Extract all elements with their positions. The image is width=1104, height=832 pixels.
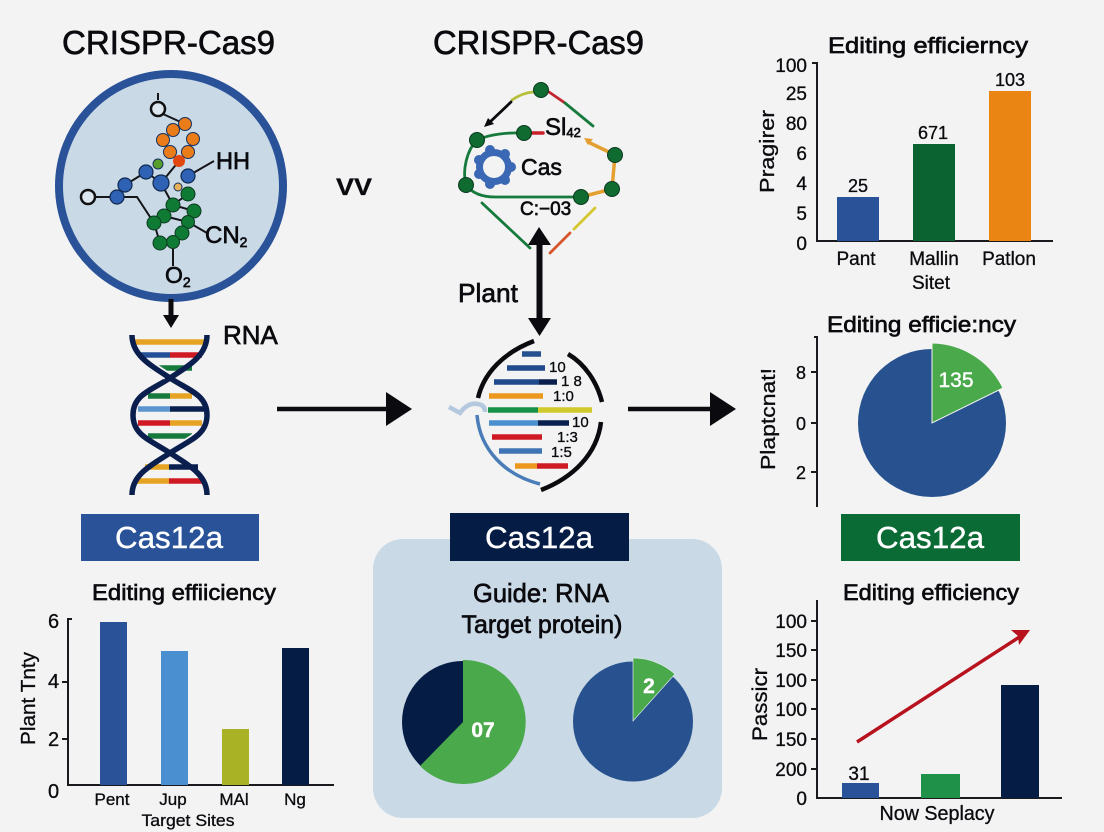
chart: bottom-left bar chart: Ng: [284, 790, 306, 809]
chart: bottom-right bar chart: Now Seplacy: [880, 803, 994, 825]
chart: bottom-left bar chart: 6: [48, 611, 59, 633]
chart: middle-right pie: 135: [938, 369, 974, 392]
chart: bottom-left bar chart: Target Sites: [142, 811, 234, 830]
pie: navy and green: 07: [471, 719, 495, 742]
panel: molecule circle: 2: [240, 234, 248, 250]
arrow: molecule to DNA: [163, 299, 179, 328]
diagram: sequence bars: 10: [572, 414, 589, 431]
chart: top-right bar chart: Patlon: [982, 249, 1036, 270]
panel: guide RNA: Target protein): [462, 611, 622, 639]
diagram: Cas network: C:−03: [520, 199, 571, 220]
banner: center Cas12a: [450, 513, 629, 561]
title: left: CRISPR-Cas9: [62, 24, 275, 61]
chart: bottom-left bar chart: MAl: [219, 790, 249, 809]
panel: molecule circle: [59, 74, 283, 298]
chart: bottom-right bar chart: Passicr: [749, 668, 772, 741]
chart: middle-right pie: 2: [796, 463, 806, 483]
panel: molecule circle: CN: [205, 222, 240, 249]
diagram: Cas network: [458, 82, 622, 253]
chart: bottom-right bar chart: 100: [775, 671, 807, 692]
chart: bottom-left bar chart: 0: [48, 781, 59, 803]
chart: bottom-left bar chart: Pent: [95, 790, 130, 809]
arrow: DNA to diagram: [277, 407, 392, 411]
diagram: sequence bars: [449, 341, 602, 490]
arrowhead: DNA to diagram: [386, 392, 412, 426]
arrow: diagram to pie: [628, 407, 714, 411]
chart: top-right bar chart: 80: [786, 114, 807, 135]
chart: bottom-right bar chart: Editing efficiency: [843, 580, 1019, 605]
chart: middle-right pie: Editing efficie:ncy: [827, 312, 1016, 337]
label: Plant: Plant: [458, 278, 519, 308]
diagram: Cas network: Cas: [521, 154, 562, 180]
pie: blue and green: [573, 658, 693, 782]
panel: molecule circle: O: [165, 262, 183, 288]
chart: top-right bar chart: 0: [796, 234, 807, 255]
chart: bottom-right bar chart: 150: [775, 641, 807, 662]
chart: top-right bar chart: 25: [848, 176, 868, 196]
double arrow: vertical: [528, 227, 551, 336]
chart: top-right bar chart: 25: [786, 84, 807, 105]
chart: top-right bar chart: 103: [995, 70, 1025, 90]
banner: right Cas12a: [841, 514, 1020, 561]
diagram: sequence bars: 10: [549, 359, 566, 376]
panel: guide RNA: [373, 539, 722, 818]
chart: top-right bar chart: [757, 33, 1053, 294]
chart: bottom-right bar chart: 0: [796, 789, 807, 810]
chart: bottom-left bar chart: Plant Tnty: [18, 652, 40, 745]
chart: top-right bar chart: Mallin: [909, 249, 959, 270]
pie: navy and green: [402, 660, 526, 784]
chart: bottom-right bar chart: 200: [775, 760, 807, 781]
banner: center Cas12a: Cas12a: [485, 520, 594, 555]
arrowhead: diagram to pie: [710, 392, 736, 426]
chart: bottom-right bar chart: 31: [848, 764, 870, 785]
chart: bottom-right bar chart: 150: [775, 730, 807, 751]
icon: Cas gear: [474, 145, 516, 189]
chart: bottom-left bar chart: 2: [48, 729, 59, 751]
banner: right Cas12a: Cas12a: [876, 520, 985, 555]
diagram: Cas network: 42: [566, 125, 581, 140]
chart: top-right bar chart: Pragirer: [757, 110, 779, 193]
panel: guide RNA: Guide: RNA: [473, 578, 610, 608]
chart: bottom-right bar chart: [749, 580, 1062, 825]
chart: top-right bar chart: 100: [775, 56, 807, 77]
chart: top-right bar chart: 671: [918, 123, 948, 143]
chart: bottom-right bar chart: 100: [775, 612, 807, 633]
label: VV: VV: [336, 174, 372, 201]
chart: bottom-left bar chart: Editing effiiciency: [92, 580, 276, 605]
title: center: CRISPR-Cas9: [433, 24, 644, 61]
diagram: sequence bars: 1:5: [551, 444, 572, 461]
chart: bottom-left bar chart: 4: [48, 671, 59, 693]
pie: blue and green: 2: [643, 675, 655, 698]
panel: molecule circle: HH: [216, 148, 250, 175]
chart: bottom-left bar chart: Jup: [159, 790, 187, 809]
chart: middle-right pie: [758, 312, 1016, 507]
diagram: Cas network: Sl: [545, 114, 566, 141]
arrow: red trend: [857, 630, 1030, 742]
panel: molecule circle: 2: [183, 274, 191, 290]
label: RNA: RNA: [223, 320, 279, 350]
chart: bottom-right bar chart: 100: [775, 700, 807, 721]
banner: left Cas12a: [81, 514, 259, 561]
chart: middle-right pie: 8: [796, 363, 806, 383]
chart: top-right bar chart: Editing efficierncy: [828, 33, 1028, 58]
chart: bottom-left bar chart: [18, 580, 334, 830]
chart: top-right bar chart: 6: [796, 144, 807, 165]
chart: top-right bar chart: Sitet: [912, 273, 951, 294]
chart: top-right bar chart: Pant: [836, 249, 876, 270]
banner: left Cas12a: Cas12a: [115, 520, 224, 555]
chart: middle-right pie: 0: [796, 414, 806, 434]
diagram: sequence bars: 1:0: [553, 388, 574, 405]
chart: top-right bar chart: 4: [796, 174, 807, 195]
diagram: sequence bars: 1 8: [561, 373, 582, 390]
icon: DNA helix: [132, 335, 207, 495]
chart: middle-right pie: Plaptcnat!: [758, 368, 780, 470]
chart: top-right bar chart: 5: [796, 204, 807, 225]
diagram: sequence bars: 1:3: [557, 429, 578, 446]
